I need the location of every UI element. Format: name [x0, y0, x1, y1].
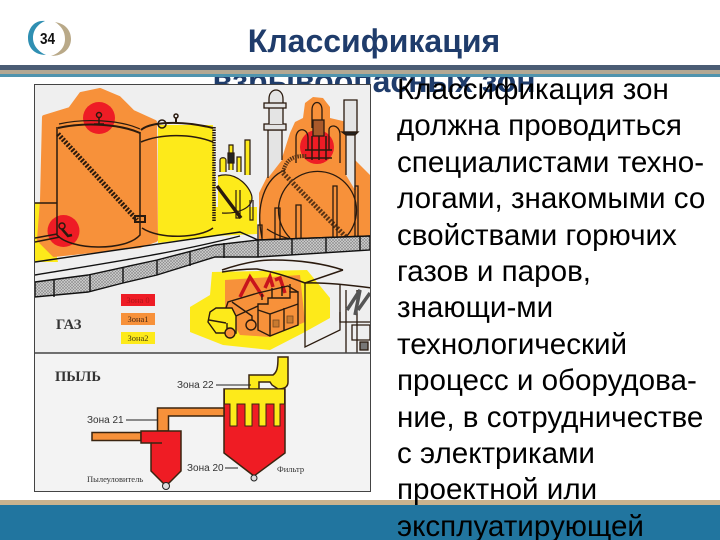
title	[212, 23, 536, 99]
zone 1 left tank	[39, 90, 156, 255]
zone 2 middle tank	[158, 125, 257, 243]
legend: Зона2	[127, 333, 149, 343]
zone 2 small tank	[218, 175, 252, 213]
filter	[224, 357, 288, 476]
label: dust: ПЫЛЬ	[55, 369, 101, 385]
label: gas: ГАЗ	[56, 317, 82, 333]
body text: ние, в сотрудничестве	[397, 401, 703, 434]
body text: знающи-ми	[397, 291, 553, 324]
body text: Классификация зон	[397, 73, 669, 106]
legend	[121, 294, 155, 344]
zone 0 circles	[83, 102, 115, 134]
dust collector and ducts	[92, 408, 224, 484]
body text: свойствами горючих	[397, 219, 677, 252]
dust labels	[87, 380, 304, 484]
truck	[208, 277, 298, 338]
page number badge: 34	[40, 31, 55, 48]
legend: Зона1	[127, 314, 149, 324]
body text: должна проводиться	[397, 109, 682, 142]
title: Классификация	[248, 23, 500, 59]
header stripes	[0, 65, 720, 77]
title: взрывоопасных зон	[212, 63, 536, 99]
dust labels: Фильтр	[277, 464, 304, 474]
body text	[397, 73, 705, 540]
body text: процесс и оборудова-	[397, 364, 697, 397]
grey tower	[264, 90, 358, 190]
body text: проектной или	[397, 473, 597, 506]
legend: Зона 0	[126, 295, 150, 305]
body text: с электриками	[397, 437, 595, 470]
illustration: explosive zones	[34, 84, 371, 492]
left tank	[35, 112, 145, 247]
zone 1 gasholder	[259, 97, 370, 240]
illustration frame	[34, 84, 370, 492]
truck zone 1	[225, 275, 305, 337]
footer band	[0, 500, 720, 540]
body text: технологический	[397, 328, 627, 361]
dust labels: Пылеуловитель	[87, 474, 143, 484]
panel: gas	[34, 84, 372, 354]
zone 2 ground left	[35, 203, 58, 262]
small tank and columns	[217, 140, 253, 220]
middle tank	[141, 114, 214, 236]
dust labels: Зона 20	[187, 463, 224, 474]
fence and road	[35, 232, 370, 297]
page number badge	[28, 20, 71, 56]
dust labels: Зона 22	[177, 380, 214, 391]
body text: специалистами техно-	[397, 146, 704, 179]
body text: логами, знакомыми со	[397, 182, 705, 215]
panel: dust	[34, 354, 370, 492]
truck zone 2	[190, 270, 330, 350]
body text: газов и паров,	[397, 255, 591, 288]
dust labels: Зона 21	[87, 415, 124, 426]
canopy and building	[222, 260, 372, 353]
gasholder	[258, 102, 358, 242]
